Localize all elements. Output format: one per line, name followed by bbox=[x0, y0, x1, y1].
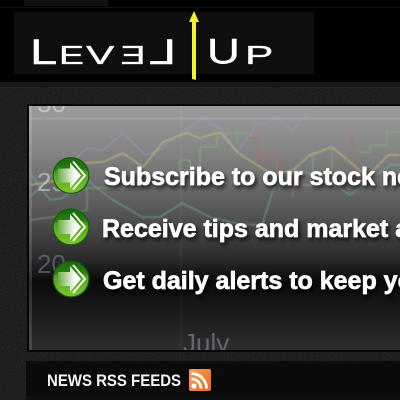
bullet 1 bbox=[52, 157, 400, 194]
icon: green arrow button bbox=[52, 208, 90, 246]
logo word: level: E bbox=[121, 41, 146, 70]
panel: news RSS feeds bar bbox=[26, 361, 400, 400]
logo word: level bbox=[30, 33, 176, 72]
panel: stock chart banner bbox=[27, 88, 400, 358]
icon: RSS bbox=[189, 369, 211, 391]
logo word: level: L bbox=[149, 33, 176, 72]
heading: news rss feeds: NEWS RSS FEEDS bbox=[47, 372, 181, 390]
chart: faded stock lines bbox=[30, 107, 400, 226]
chart axis labels bbox=[37, 88, 229, 358]
chart axis labels: 20 bbox=[37, 249, 66, 279]
chart axis labels: 25 bbox=[37, 167, 66, 197]
logo word: level: E bbox=[59, 41, 84, 70]
icon: yellow up arrow bbox=[189, 11, 199, 80]
logo: Level Up bbox=[14, 11, 314, 80]
icon: green arrow button bbox=[52, 260, 90, 298]
logo word: level: V bbox=[86, 41, 115, 70]
logo word: up: U bbox=[207, 32, 240, 71]
chart axis labels: July bbox=[183, 328, 229, 358]
logo word: up: P bbox=[245, 41, 273, 70]
logo word: up bbox=[207, 32, 273, 71]
logo word: level: L bbox=[30, 33, 57, 72]
bullet 2 bbox=[52, 208, 400, 246]
chart axis labels: 30 bbox=[37, 88, 66, 118]
icon: green arrow button bbox=[52, 157, 90, 194]
bullet 3 bbox=[52, 260, 400, 298]
header band bbox=[0, 0, 400, 87]
